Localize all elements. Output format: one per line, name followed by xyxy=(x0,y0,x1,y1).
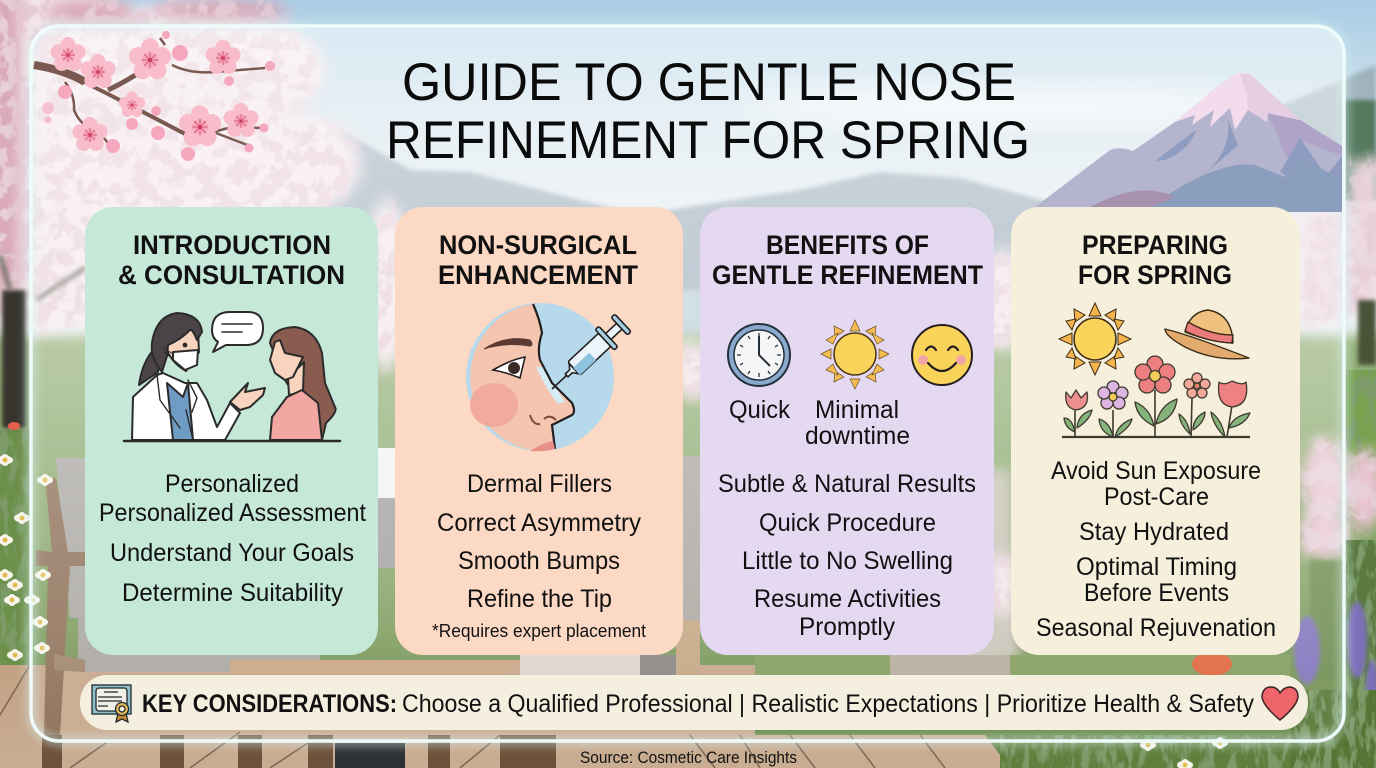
text block: consultation points: Personalized Assessment xyxy=(99,499,366,527)
illustration: snow-capped mountain xyxy=(1035,73,1342,212)
footnote: expert placement: *Requires expert placement xyxy=(432,621,646,641)
heading: preparing: PREPARING xyxy=(1082,230,1228,260)
deck xyxy=(0,665,1010,768)
heading: benefits: BENEFITS OF xyxy=(766,230,929,260)
text block: benefits: Resume Activities xyxy=(754,585,941,613)
heading: preparing: FOR SPRING xyxy=(1078,260,1232,290)
text block: filler benefits: Correct Asymmetry xyxy=(437,509,641,537)
text block: benefits: Quick Procedure xyxy=(759,509,936,537)
text block: filler benefits: Dermal Fillers xyxy=(467,470,612,498)
icon captions: downtime xyxy=(805,422,910,450)
text block: benefits: Promptly xyxy=(799,613,895,641)
icon: sun hat xyxy=(1165,310,1249,359)
text block: spring preparation xyxy=(1036,457,1276,642)
text block: benefits: Little to No Swelling xyxy=(742,547,953,575)
heading: introduction: & CONSULTATION xyxy=(118,260,345,290)
icon: sun xyxy=(1059,303,1131,375)
icon: clock xyxy=(728,324,790,386)
cherry trees, left xyxy=(0,0,1022,615)
text block: spring preparation: Avoid Sun Exposure xyxy=(1051,457,1261,485)
icon: doctor consulting patient xyxy=(124,312,340,441)
icon captions xyxy=(729,396,910,450)
text block: consultation points: Determine Suitability xyxy=(122,579,343,607)
text block: filler benefits: Refine the Tip xyxy=(467,585,612,613)
icon: smiling face xyxy=(912,325,972,385)
title: REFINEMENT FOR SPRING xyxy=(386,111,1030,170)
text block: benefits: Subtle & Natural Results xyxy=(718,470,976,498)
chair and table xyxy=(56,458,85,618)
icon captions: Minimal xyxy=(815,396,899,424)
panel: preparing for spring xyxy=(1011,207,1300,655)
far mountain ranges xyxy=(250,132,1060,330)
heading: preparing xyxy=(1078,230,1232,290)
icon captions: Quick xyxy=(729,396,790,424)
text block: filler benefits: Smooth Bumps xyxy=(458,547,620,575)
banner: key considerations xyxy=(80,675,1308,730)
text: key considerations label: KEY CONSIDERATIONS: xyxy=(142,690,397,718)
text block: spring preparation: Before Events xyxy=(1084,579,1229,607)
heading: non-surgical xyxy=(438,230,638,290)
icon: face profile with syringe xyxy=(466,303,632,451)
text block: filler benefits xyxy=(437,470,641,613)
heading: non-surgical: NON-SURGICAL xyxy=(439,230,637,260)
text block: spring preparation: Post-Care xyxy=(1104,483,1209,511)
panel: non-surgical enhancement xyxy=(395,207,683,655)
cherry trees, right xyxy=(1302,160,1376,323)
heading: introduction xyxy=(118,230,345,290)
text block: consultation points: Personalized xyxy=(165,470,299,498)
panel: introduction and consultation xyxy=(85,207,378,655)
meadow flowers xyxy=(0,454,1228,768)
text: considerations list: Choose a Qualified Professional | Realistic Expectations | Prioritize Health & Safety xyxy=(402,690,1254,718)
icon: certificate xyxy=(92,685,131,722)
text block: benefits xyxy=(718,470,976,641)
text block: spring preparation: Seasonal Rejuvenation xyxy=(1036,614,1276,642)
source credit: Source: Cosmetic Care Insights xyxy=(580,748,797,767)
icon: heart xyxy=(1262,687,1298,720)
illustration: cherry blossom branch xyxy=(34,31,275,161)
heading: benefits: GENTLE REFINEMENT xyxy=(712,260,983,290)
text block: consultation points xyxy=(99,470,366,607)
heading: benefits xyxy=(712,230,983,290)
text block: spring preparation: Stay Hydrated xyxy=(1079,518,1229,546)
heading: introduction: INTRODUCTION xyxy=(133,230,331,260)
title xyxy=(386,53,1030,170)
panel: benefits of gentle refinement xyxy=(700,207,994,655)
icon: sun xyxy=(821,320,889,389)
heading: non-surgical: ENHANCEMENT xyxy=(438,260,638,290)
text block: consultation points: Understand Your Goals xyxy=(110,539,354,567)
text block: spring preparation: Optimal Timing xyxy=(1076,553,1237,581)
path through meadow xyxy=(900,470,1020,680)
icon: spring flowers xyxy=(1062,356,1250,437)
title: GUIDE TO GENTLE NOSE xyxy=(402,53,1016,112)
